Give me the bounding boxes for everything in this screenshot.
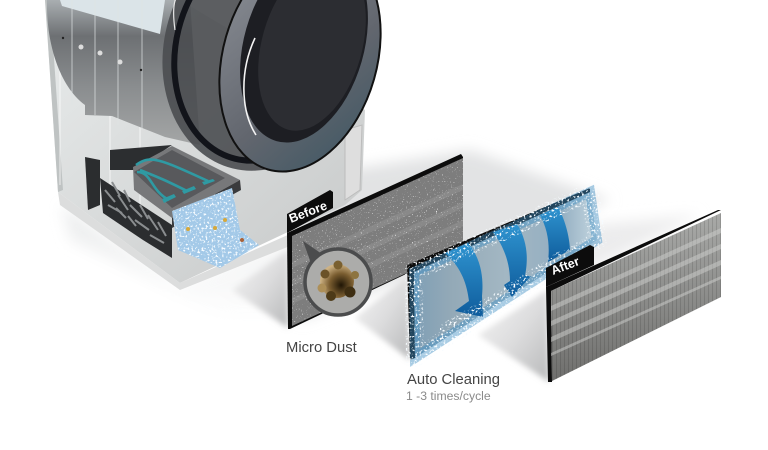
label: micro dust: Micro Dust — [286, 340, 357, 356]
water filter — [172, 188, 259, 268]
after tab: After — [549, 254, 581, 278]
label: cleaning frequency: 1 -3 times/cycle — [406, 389, 491, 403]
label: auto cleaning: Auto Cleaning — [407, 372, 500, 388]
after tab — [546, 245, 594, 287]
blue arrows — [445, 207, 570, 317]
floor shadows — [62, 150, 700, 382]
before tab: Before — [287, 199, 329, 226]
fins — [100, 178, 172, 258]
teal pipes — [136, 160, 208, 200]
washer drum — [47, 0, 200, 145]
washer door gasket — [137, 0, 387, 192]
washer door ring — [194, 0, 406, 191]
filter auto cleaning panel — [407, 188, 597, 360]
micro dust magnifier callout — [303, 241, 371, 315]
washer machine transparent body — [45, 0, 365, 290]
top plate — [133, 146, 240, 218]
filter before panel — [287, 154, 463, 329]
filter after panel — [546, 210, 721, 382]
before tab — [287, 190, 333, 233]
heat exchanger — [85, 145, 259, 268]
icon: dust particle — [318, 260, 359, 301]
